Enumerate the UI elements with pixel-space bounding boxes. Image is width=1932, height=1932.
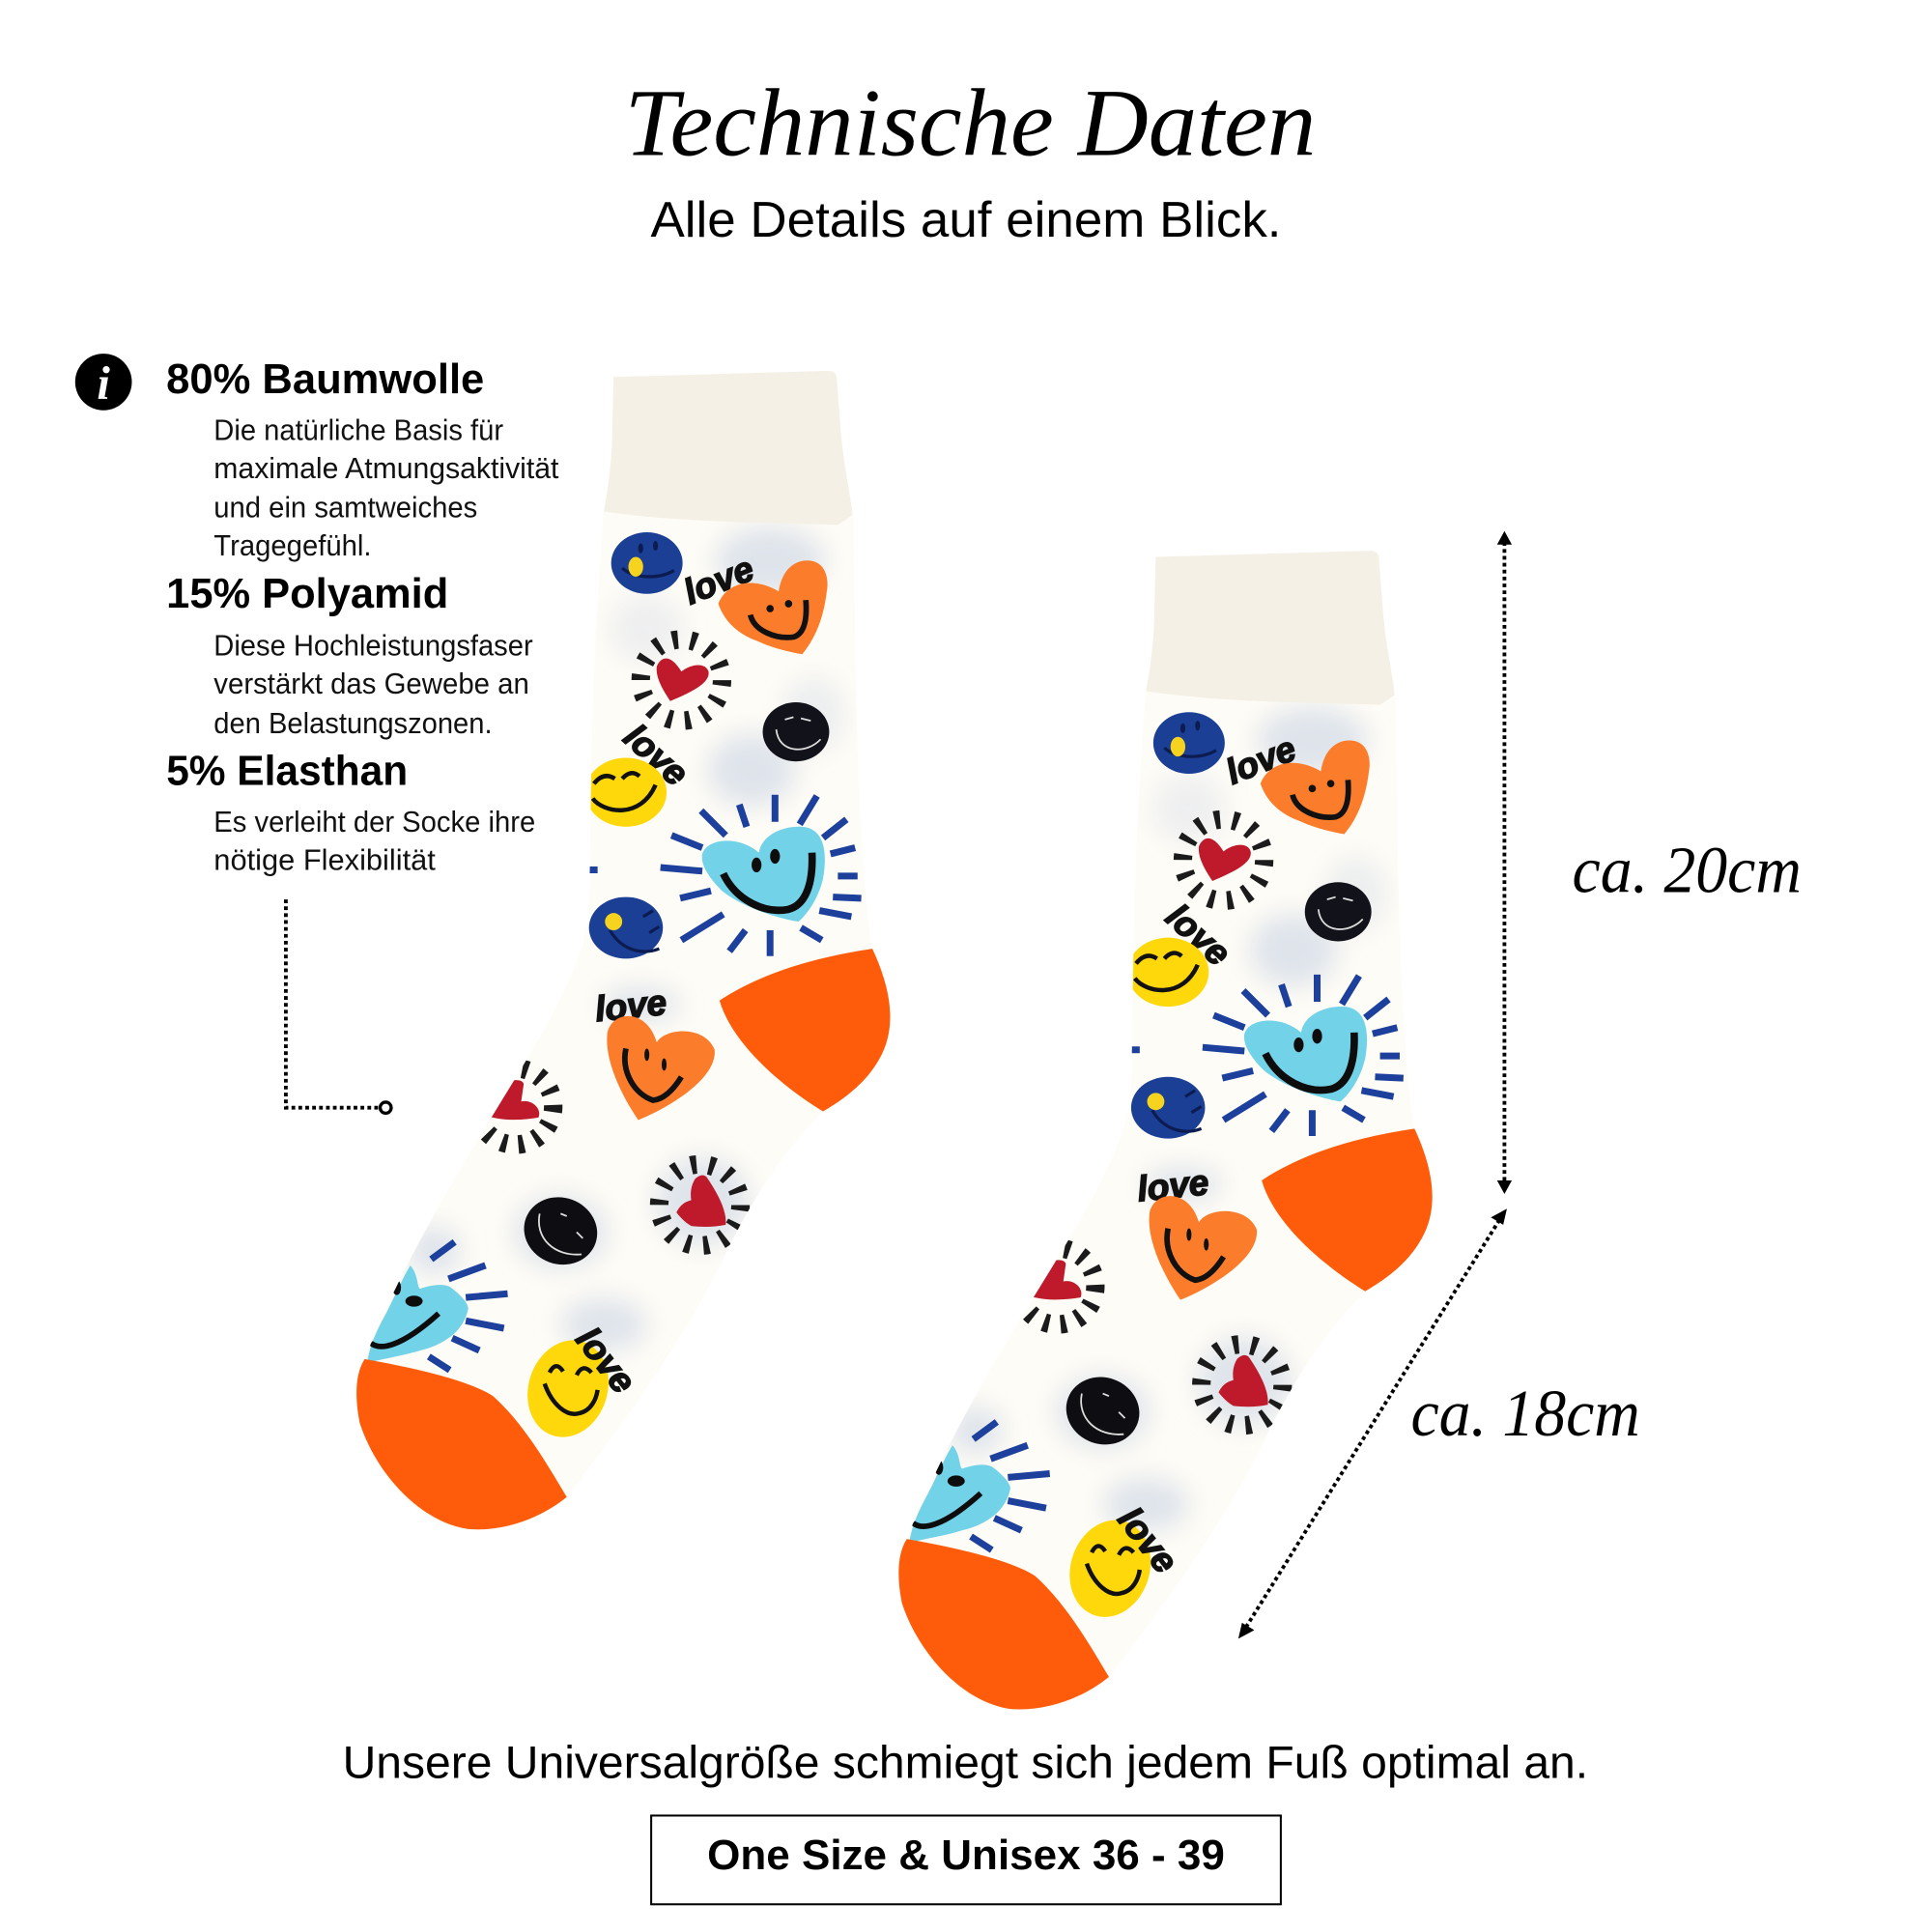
love lettering: love [568, 1320, 643, 1401]
smiley: black [524, 1197, 597, 1265]
sunburst: blue heart on toe [909, 1422, 1050, 1550]
arrow: foot length [1238, 1208, 1507, 1638]
size box: One Size & Unisex 36 - 39 [707, 1833, 1225, 1879]
sunburst: red heart [640, 639, 722, 721]
love lettering: love [1110, 1500, 1185, 1580]
smiley: black [763, 702, 829, 761]
smiley: blue [611, 532, 683, 594]
label: foot length: ca. 18cm [1410, 1377, 1640, 1450]
material: elastane: nötige Flexibilität [213, 844, 436, 877]
material: cotton: maximale Atmungsaktivität [213, 452, 559, 485]
sock cuff [604, 371, 853, 525]
sock toe [356, 1359, 567, 1529]
smiley: black [1066, 1378, 1140, 1445]
material: polyamide: Diese Hochleistungsfaser [213, 630, 533, 663]
heart: orange [1261, 741, 1370, 835]
material: cotton: Tragegefühl. [213, 529, 372, 562]
arrow: leg height [1497, 531, 1512, 1194]
smiley: blue [1131, 1077, 1205, 1139]
size statement: Unsere Universalgröße schmiegt sich jedem Fuß optimal an. [343, 1738, 1588, 1789]
smiley: black [1305, 882, 1372, 941]
sunburst: blue heart [1131, 975, 1404, 1136]
smiley: yellow [1069, 1520, 1151, 1617]
sock heel [720, 949, 890, 1112]
sock heel [1262, 1128, 1433, 1292]
icon: info [75, 354, 131, 411]
smiley: yellow [1127, 938, 1208, 1007]
smiley: yellow [585, 757, 667, 827]
sunburst: red heart [1182, 819, 1264, 900]
size box [651, 1815, 1281, 1904]
sunburst: red heart [659, 1164, 741, 1246]
love lettering: love [593, 982, 668, 1029]
sunburst: red heart [1019, 1248, 1095, 1324]
love lettering: love [678, 549, 759, 612]
sunburst: blue heart on toe [367, 1242, 508, 1370]
sunburst: red heart [1202, 1345, 1283, 1426]
heart: orange [1150, 1196, 1257, 1300]
subtitle: Alle Details auf einem Blick. [650, 192, 1282, 248]
smiley: blue [1153, 712, 1225, 774]
material: elastane [166, 748, 535, 877]
sock: left [355, 371, 890, 1530]
material: polyamide: den Belastungszonen. [213, 707, 493, 740]
callout leader line [286, 899, 391, 1113]
material: cotton: 80% Baumwolle [166, 356, 484, 403]
love lettering: love [1158, 896, 1238, 974]
material: elastane: 5% Elasthan [166, 749, 408, 795]
love lettering: love [1220, 728, 1301, 792]
sock: right [897, 551, 1433, 1710]
sock cuff [1146, 551, 1395, 705]
label: leg height: ca. 20cm [1573, 833, 1802, 906]
heart: orange [719, 560, 828, 654]
sock toe [898, 1539, 1109, 1710]
love lettering: love [1135, 1162, 1210, 1209]
material: cotton [166, 356, 559, 562]
material: elastane: Es verleiht der Socke ihre [213, 806, 535, 838]
smiley: blue [589, 897, 663, 958]
sunburst: red heart [477, 1068, 554, 1145]
heart: orange [607, 1016, 715, 1120]
title: Technische Daten [625, 70, 1316, 177]
love lettering: love [616, 717, 696, 794]
smiley: yellow [527, 1340, 609, 1437]
material: polyamide [166, 571, 533, 740]
material: cotton: Die natürliche Basis für [213, 413, 503, 446]
material: polyamide: verstärkt das Gewebe an [213, 668, 529, 700]
material: polyamide: 15% Polyamid [166, 571, 448, 617]
sunburst: blue heart [589, 795, 862, 956]
material: cotton: und ein samtweiches [213, 492, 477, 525]
icon: info: i [97, 358, 110, 410]
